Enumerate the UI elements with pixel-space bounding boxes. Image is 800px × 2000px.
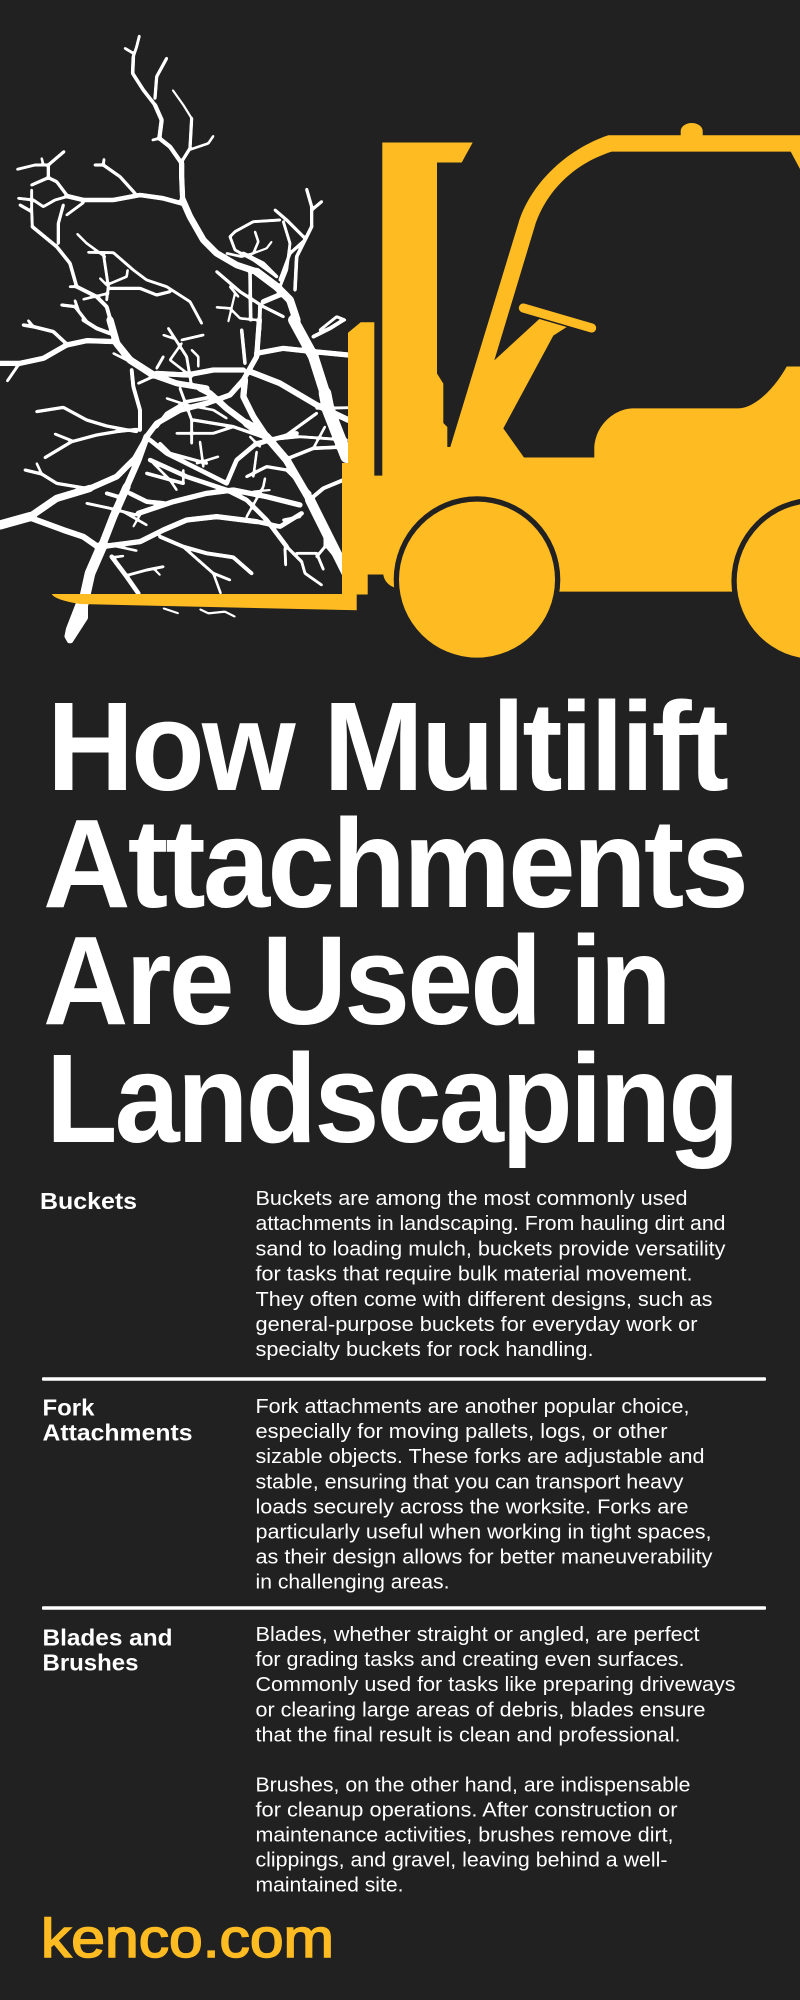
panel: Buckets [40,1187,726,1361]
heading: Buckets: Buckets [40,1188,137,1214]
text block: Buckets description: They often come with different designs, such as [256,1288,712,1311]
heading: Fork Attachments: Fork [42,1395,95,1421]
title: Landscaping [46,1028,737,1169]
text block: Buckets description: for tasks that require bulk material movement. [256,1263,692,1286]
text block: Buckets description: sand to loading mulch, buckets provide versatility [256,1237,726,1260]
text block: Buckets description: Buckets are among the most commonly used [256,1187,688,1210]
text block: Fork Attachments description: particularly useful when working in tight spaces, [256,1520,712,1544]
text block: Brushes description: maintenance activities, brushes remove dirt, [256,1824,674,1847]
text block: Fork Attachments description [256,1395,713,1594]
text block: Brushes description: clippings, and gravel, leaving behind a well- [256,1849,668,1872]
heading: Blades and Brushes [42,1625,172,1676]
text block: Fork Attachments description: as their design allows for better maneuverability [256,1546,713,1569]
heading: Blades and Brushes: Brushes [42,1650,138,1676]
text block: Blades description: for grading tasks and creating even surfaces. [256,1648,684,1671]
text block: Brushes description: maintained site. [256,1874,404,1897]
text block: Blades description: or clearing large areas of debris, blades ensure [256,1698,706,1721]
heading: Fork Attachments: Attachments [42,1420,192,1446]
front wheel [394,496,560,663]
heading: Blades and Brushes: Blades and [42,1625,172,1651]
text block: Brushes description: for cleanup operations. After construction or [256,1799,678,1822]
text block: Blades description: Blades, whether straight or angled, are perfect [256,1623,700,1646]
title: How Multilift [47,676,728,817]
text block: Buckets description: general-purpose buckets for everyday work or [256,1313,698,1336]
heading: Fork Attachments [42,1395,192,1446]
text block: Brushes description [256,1774,690,1897]
text block: Fork Attachments description: in challenging areas. [256,1571,450,1594]
text block: Blades description [256,1623,736,1746]
text block: Blades description: Commonly used for tasks like preparing driveways [256,1673,736,1696]
title: Are Used in [43,910,669,1051]
panel: Blades and Brushes [42,1623,736,1897]
text block: Buckets description: specialty buckets for rock handling. [256,1338,594,1361]
text block: Fork Attachments description: stable, ensuring that you can transport heavy [256,1470,684,1493]
text block: Blades description: that the final result is clean and professional. [256,1723,680,1746]
steering wheel [523,308,592,328]
illustration: white bare tree branches [0,36,348,643]
text block: Fork Attachments description: especially for moving pallets, logs, or other [256,1420,668,1443]
panel: Fork Attachments [42,1395,713,1594]
text block: Fork Attachments description: Fork attachments are another popular choice, [256,1395,690,1418]
footer: kenco.com brand: kenco.com [41,1907,334,1969]
forklift body, mast and fork [52,123,800,610]
text block: Buckets description [256,1187,726,1361]
text block: Buckets description: attachments in landscaping. From hauling dirt and [256,1212,726,1235]
text block: Fork Attachments description: sizable objects. These forks are adjustable and [256,1445,704,1468]
title [43,676,746,1169]
text block: Brushes description: Brushes, on the other hand, are indispensable [256,1774,690,1797]
text block: Fork Attachments description: loads securely across the worksite. Forks are [256,1495,688,1518]
illustration: yellow forklift [52,123,800,664]
rear wheel [731,498,800,664]
title: Attachments [43,793,746,934]
